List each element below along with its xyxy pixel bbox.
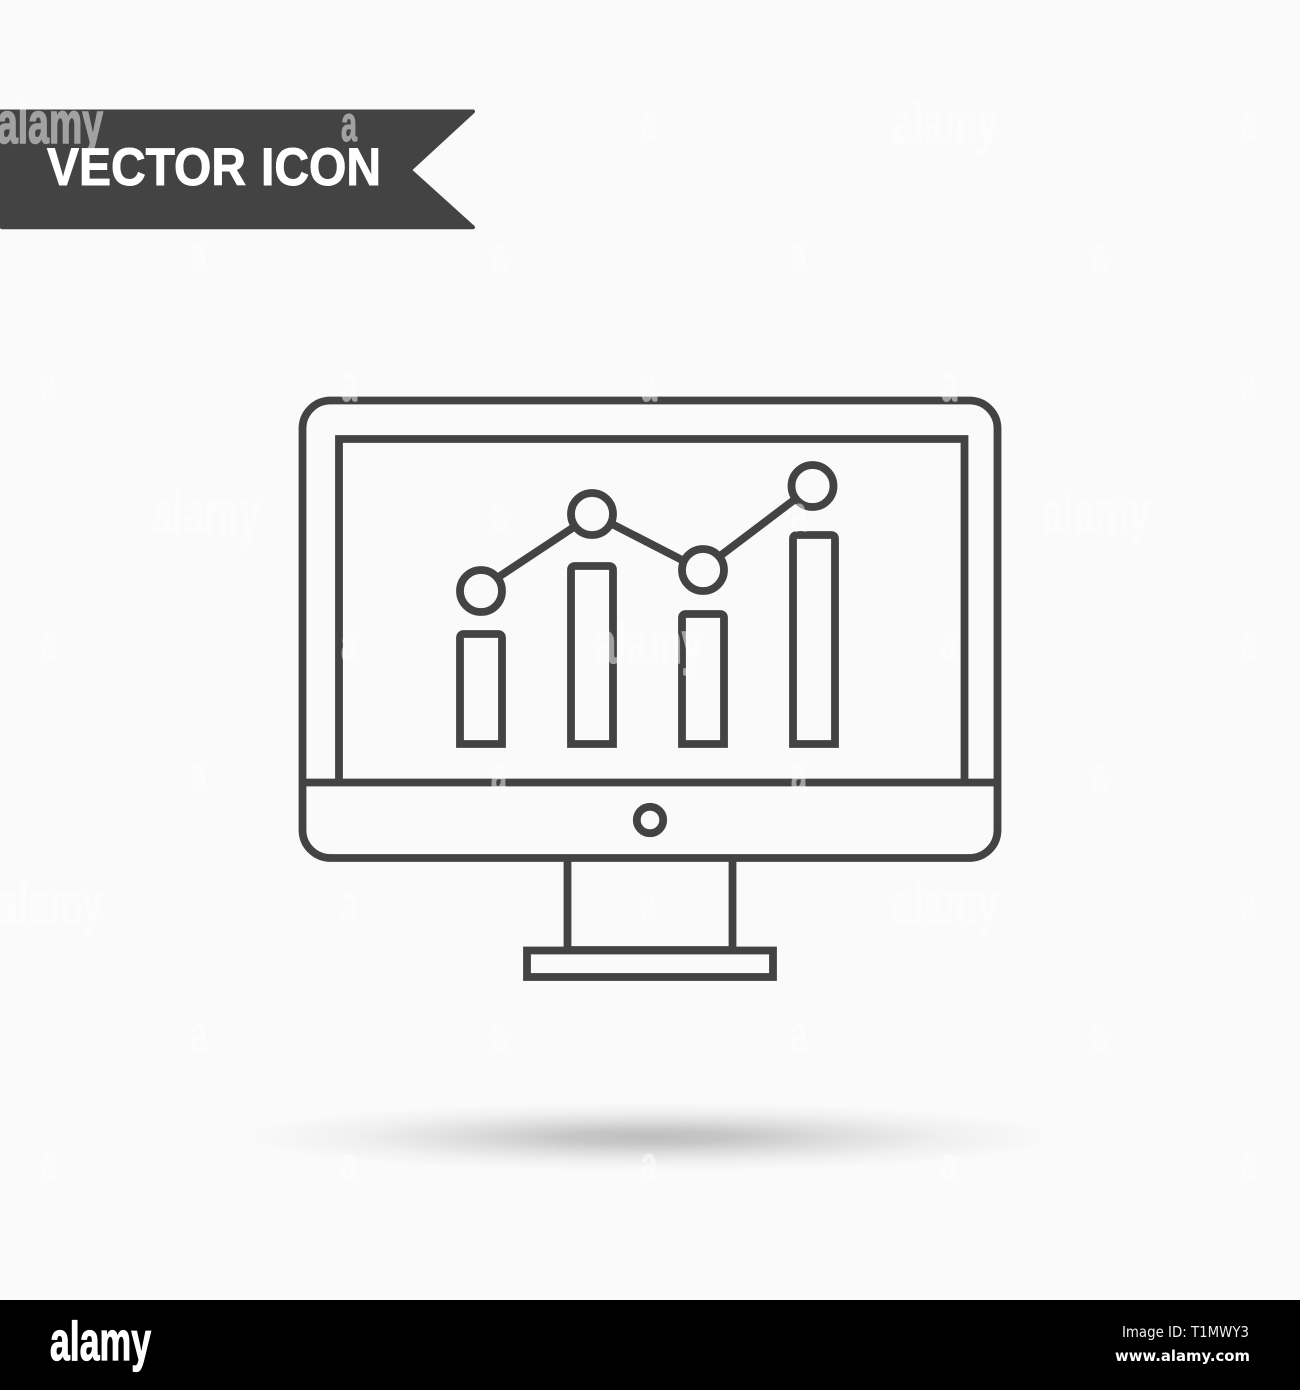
- watermarks: a: [641, 1136, 658, 1192]
- watermarks: a: [1241, 1136, 1258, 1192]
- watermarks: a: [41, 616, 58, 672]
- watermarks: alamy: [0, 871, 103, 936]
- watermarks: a: [191, 226, 208, 282]
- watermarks: a: [791, 486, 808, 542]
- watermarks: alamy: [1042, 481, 1150, 546]
- watermarks: a: [191, 746, 208, 802]
- watermarks: a: [1241, 356, 1258, 412]
- watermarks: a: [641, 96, 658, 152]
- drop shadow: [240, 1102, 1060, 1172]
- ribbon banner: [0, 110, 473, 228]
- watermarks: a: [41, 1136, 58, 1192]
- icon: monitor with chart: [302, 400, 998, 977]
- watermarks: a: [1091, 226, 1108, 282]
- line chart: [460, 465, 834, 612]
- watermarks: a: [1241, 96, 1258, 152]
- watermarks: alamy: [0, 91, 103, 156]
- watermarks: a: [1091, 746, 1108, 802]
- watermarks: a: [191, 1006, 208, 1062]
- footer logo: alamy: [50, 1310, 151, 1372]
- watermarks: a: [1241, 616, 1258, 672]
- watermarks: a: [791, 746, 808, 802]
- watermarks: a: [341, 1136, 358, 1192]
- watermarks: a: [491, 746, 508, 802]
- monitor screen: [339, 439, 964, 782]
- watermarks: a: [791, 1006, 808, 1062]
- footer site: www.alamy.com: [1115, 1347, 1250, 1365]
- watermarks: a: [491, 226, 508, 282]
- monitor body: [302, 400, 998, 858]
- watermarks: a: [41, 356, 58, 412]
- footer bar: [0, 1300, 1300, 1390]
- watermarks: a: [491, 486, 508, 542]
- monitor stand: [568, 858, 732, 950]
- watermarks: a: [341, 96, 358, 152]
- watermarks: alamy: [892, 91, 998, 156]
- watermarks: a: [491, 1006, 508, 1062]
- bar chart: [460, 535, 835, 744]
- power button: [637, 807, 663, 833]
- banner label: ICON: [261, 138, 381, 197]
- banner label: [47, 138, 381, 197]
- watermarks: a: [641, 876, 658, 932]
- monitor base: [527, 950, 773, 977]
- watermarks: a: [941, 1136, 958, 1192]
- watermarks: a: [641, 356, 658, 412]
- watermarks: a: [341, 356, 358, 412]
- watermarks: a: [941, 616, 958, 672]
- watermarks: a: [341, 616, 358, 672]
- watermarks: a: [1091, 1006, 1108, 1062]
- watermarks: alamy: [892, 871, 998, 936]
- watermarks: a: [941, 356, 958, 412]
- watermarks: a: [791, 226, 808, 282]
- watermarks: alamy: [152, 481, 260, 546]
- banner label: VECTOR: [47, 138, 246, 197]
- watermarks: a: [1241, 876, 1258, 932]
- watermarks: [0, 91, 1258, 1192]
- monitor chin line: [302, 779, 998, 786]
- watermarks: a: [341, 876, 358, 932]
- footer image id: Image ID: T1MWY3: [1122, 1323, 1249, 1341]
- watermarks: alamy: [595, 611, 703, 676]
